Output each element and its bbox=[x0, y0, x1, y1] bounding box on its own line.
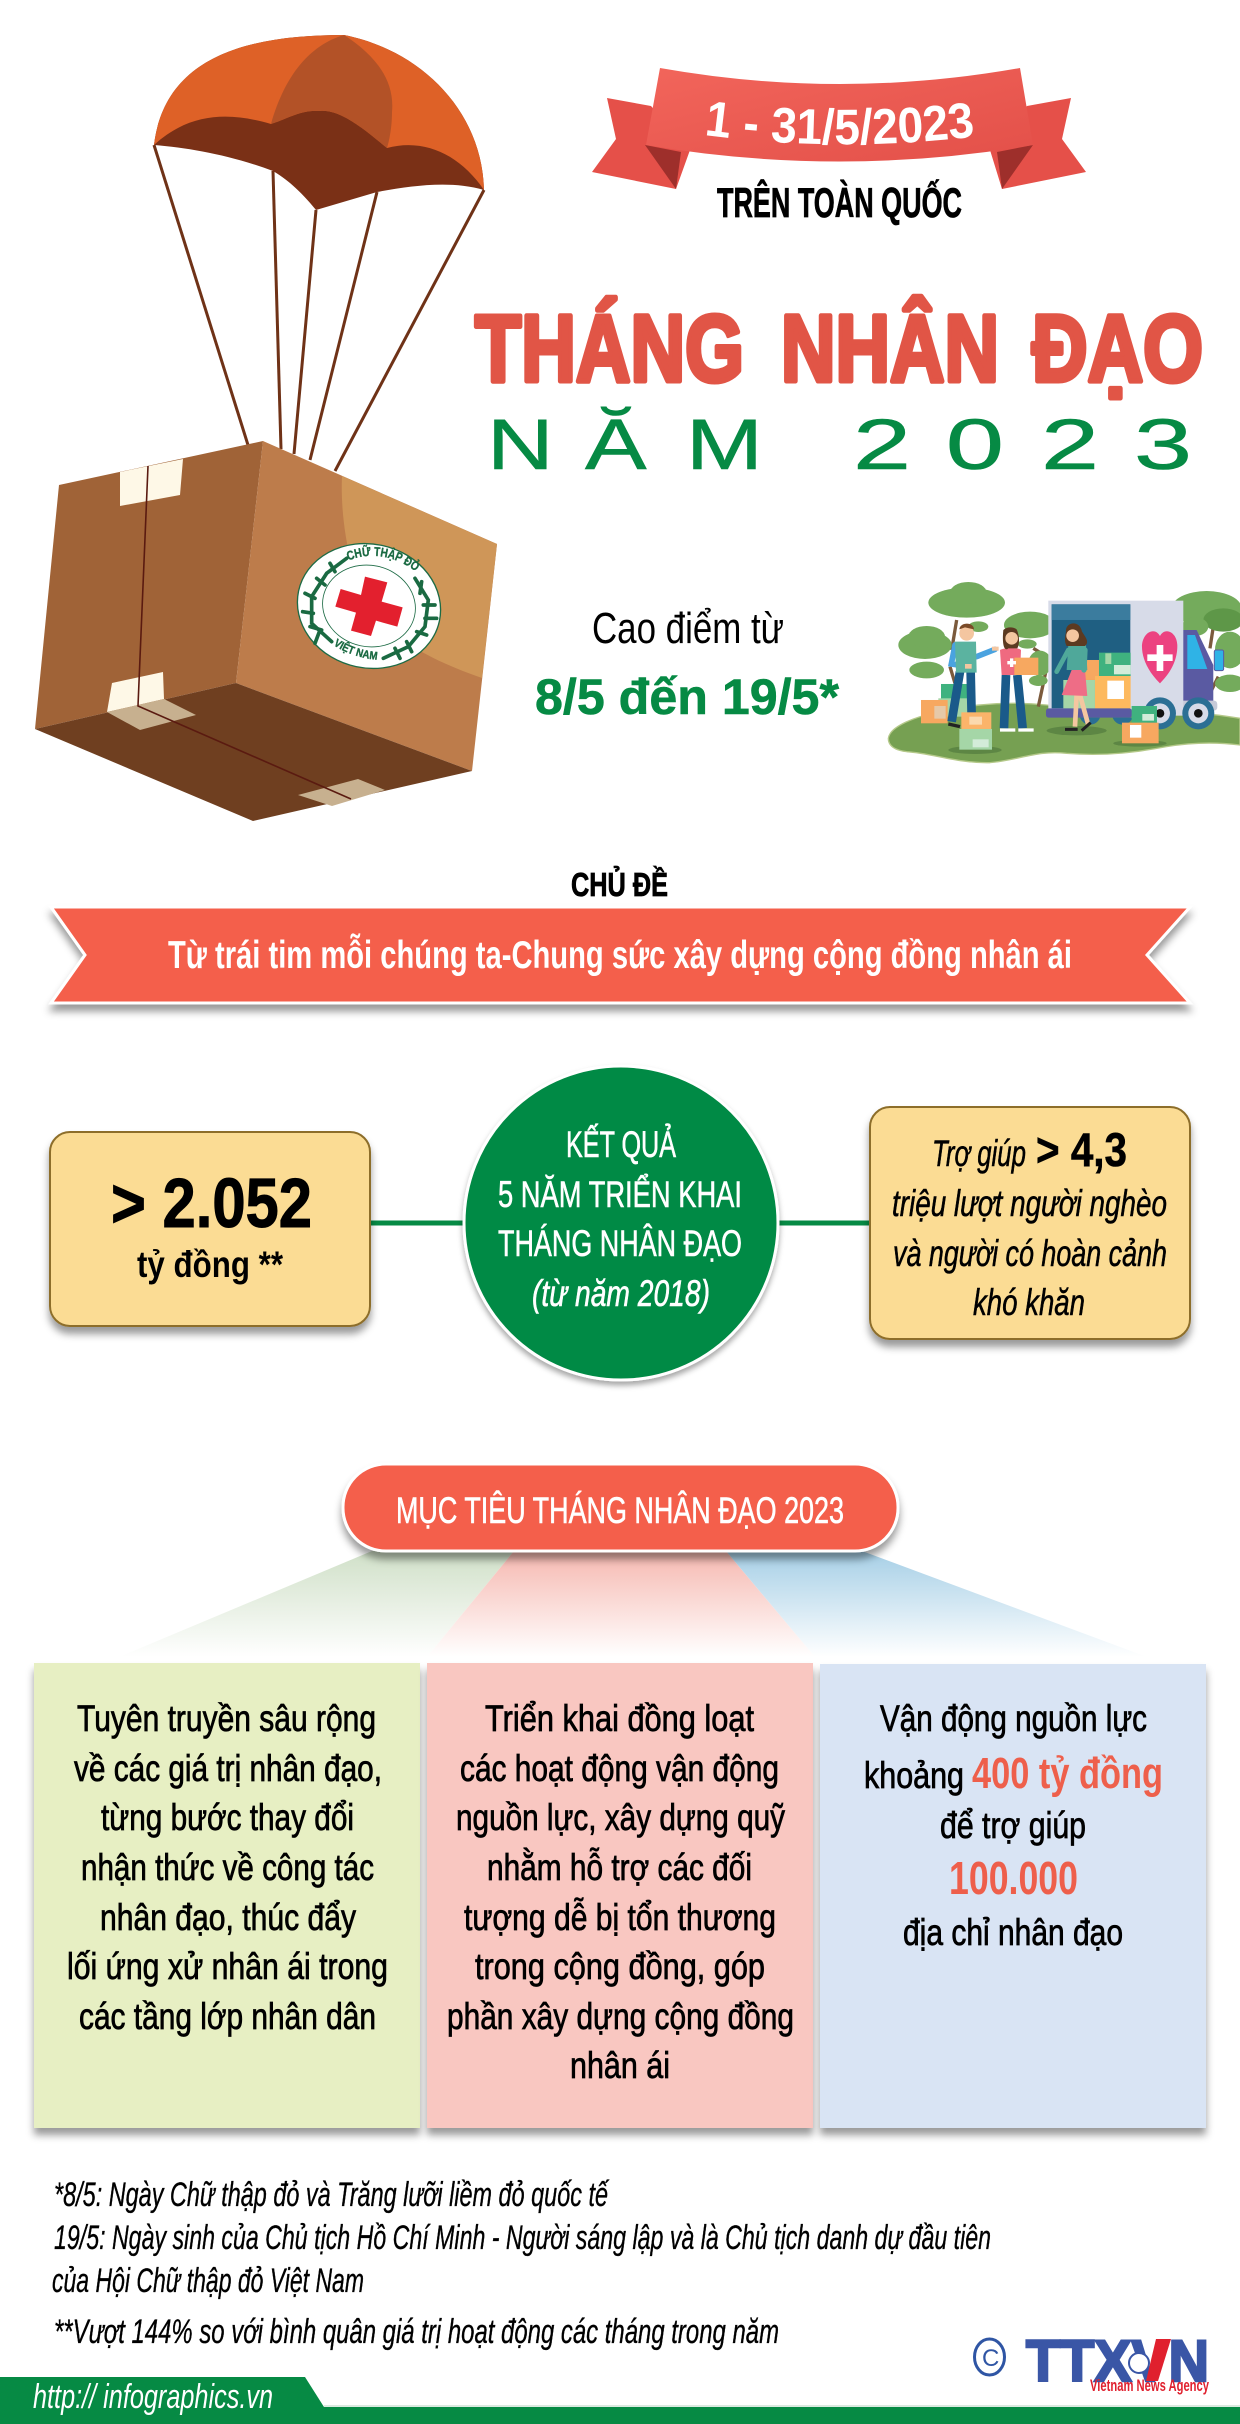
stat card: total funds: > 2.052 bbox=[111, 1164, 312, 1242]
theme banner bbox=[51, 907, 1190, 1003]
results circle: THÁNG NHÂN ĐẠO bbox=[498, 1223, 742, 1264]
ground bbox=[888, 703, 1240, 763]
footnotes: của Hội Chữ thập đỏ Việt Nam bbox=[52, 2262, 364, 2300]
location text: TRÊN TOÀN QUỐC bbox=[717, 178, 962, 226]
title: NHÂN bbox=[781, 295, 999, 402]
title: ĐẠO bbox=[1032, 296, 1203, 402]
gradient rays from heading to panels bbox=[119, 1551, 1147, 1657]
panel: activities objective: nhân ái bbox=[570, 2045, 670, 2086]
footer url: http:// infographics.vn bbox=[33, 2378, 273, 2416]
panel: fundraising objective: khoảng bbox=[864, 1755, 964, 1796]
panel: awareness objective: từng bước thay đổi bbox=[101, 1797, 354, 1838]
section label: theme: CHỦ ĐỀ bbox=[571, 866, 668, 903]
title: THÁNG bbox=[475, 296, 744, 402]
peak period text bbox=[535, 604, 840, 725]
panel: fundraising objective: địa chỉ nhân đạo bbox=[903, 1912, 1123, 1953]
parachute strings bbox=[154, 145, 484, 471]
subtitle: year bbox=[487, 405, 1192, 485]
truck bbox=[1046, 601, 1224, 729]
panel: awareness objective: các tầng lớp nhân dân bbox=[79, 1996, 376, 2037]
footnotes: **Vượt 144% so với bình quân giá trị hoạt động các tháng trong năm bbox=[54, 2313, 779, 2351]
footnotes bbox=[52, 2176, 991, 2351]
panel: activities objective bbox=[427, 1663, 813, 2128]
panel: activities objective: nhằm hỗ trợ các đối bbox=[487, 1847, 752, 1888]
stat card: people helped bbox=[870, 1107, 1190, 1339]
objectives heading pill bbox=[343, 1464, 898, 1551]
panel: awareness objective: lối ứng xử nhân ái trong bbox=[67, 1946, 388, 1987]
panel: activities objective: phần xây dựng cộng đồng bbox=[447, 1996, 794, 2037]
panel: fundraising objective: 400 tỷ đồng bbox=[972, 1749, 1163, 1798]
cardboard box bbox=[35, 441, 497, 821]
panel: activities objective: Triển khai đồng loạt bbox=[485, 1698, 755, 1739]
ribbon folds bbox=[645, 145, 681, 189]
panel: awareness objective bbox=[34, 1663, 420, 2128]
stat card: people helped: khó khăn bbox=[973, 1282, 1085, 1323]
icon: Red Cross Vietnam emblem: CHỮ THẬP ĐỎ bbox=[346, 544, 420, 570]
icon: Red Cross Vietnam emblem: VIỆT NAM bbox=[335, 638, 378, 660]
panel: fundraising objective bbox=[820, 1664, 1206, 2128]
panel: activities objective: nguồn lực, xây dựng quỹ bbox=[456, 1797, 785, 1838]
illustration: volunteers unloading aid truck bbox=[888, 582, 1240, 763]
footnotes: *8/5: Ngày Chữ thập đỏ và Trăng lưỡi liềm đỏ quốc tế bbox=[54, 2176, 609, 2214]
cargo boxes bbox=[921, 653, 1159, 743]
people bbox=[948, 623, 1091, 731]
panel: fundraising objective: 100.000 bbox=[949, 1852, 1078, 1904]
panel: awareness objective: Tuyên truyền sâu rộng bbox=[77, 1698, 376, 1739]
illustration: parachute carrying a Red Cross box bbox=[35, 35, 497, 821]
front boxes bbox=[959, 712, 992, 750]
panel: activities objective: các hoạt động vận động bbox=[460, 1748, 779, 1789]
ribbon main band bbox=[646, 68, 1033, 162]
peak period text: Cao điểm từ bbox=[592, 604, 784, 653]
trees bbox=[898, 582, 1240, 707]
results circle bbox=[464, 1066, 778, 1380]
results circle: KẾT QUẢ bbox=[566, 1124, 676, 1165]
panel: fundraising objective: để trợ giúp bbox=[940, 1805, 1086, 1846]
right tail bbox=[990, 98, 1086, 189]
panel: activities objective: trong cộng đồng, góp bbox=[475, 1946, 765, 1987]
panel: fundraising objective: Vận động nguồn lực bbox=[880, 1698, 1147, 1739]
right fold bbox=[997, 145, 1033, 189]
panel: awareness objective: về các giá trị nhân đạo, bbox=[74, 1748, 382, 1789]
subtitle: year: 2023 bbox=[853, 405, 1192, 484]
date ribbon bbox=[592, 68, 1086, 189]
ribbon tails bbox=[592, 98, 690, 189]
objectives heading pill: MỤC TIÊU THÁNG NHÂN ĐẠO 2023 bbox=[396, 1490, 844, 1531]
panel: activities objective: tượng dễ bị tổn thương bbox=[464, 1897, 776, 1938]
results circle: (từ năm 2018) bbox=[532, 1273, 710, 1314]
results circle: 5 NĂM TRIỂN KHAI bbox=[498, 1173, 742, 1215]
panel: awareness objective: nhân đạo, thúc đẩy bbox=[100, 1897, 356, 1938]
title bbox=[475, 295, 1203, 402]
icon: Red Cross Vietnam emblem bbox=[296, 542, 442, 670]
date text: 1 - 31/5/2023 bbox=[706, 102, 973, 146]
subtitle: year: NĂM bbox=[487, 405, 763, 485]
parachute canopy bbox=[154, 35, 484, 210]
connector lines bbox=[370, 1220, 870, 1226]
peak period text: 8/5 đến 19/5* bbox=[535, 669, 840, 725]
logo: TTXVN: C bbox=[982, 2345, 999, 2372]
panel: awareness objective: nhận thức về công tác bbox=[81, 1847, 374, 1888]
stat card: total funds bbox=[50, 1132, 370, 1326]
stat card: people helped: Trợ giúp bbox=[932, 1133, 1026, 1174]
footer bar bbox=[0, 2377, 1240, 2424]
logo: TTXVN: TTXVN bbox=[1026, 2329, 1209, 2394]
stat card: people helped: > 4,3 bbox=[1036, 1123, 1127, 1176]
stat card: total funds: tỷ đồng ** bbox=[137, 1244, 283, 1285]
